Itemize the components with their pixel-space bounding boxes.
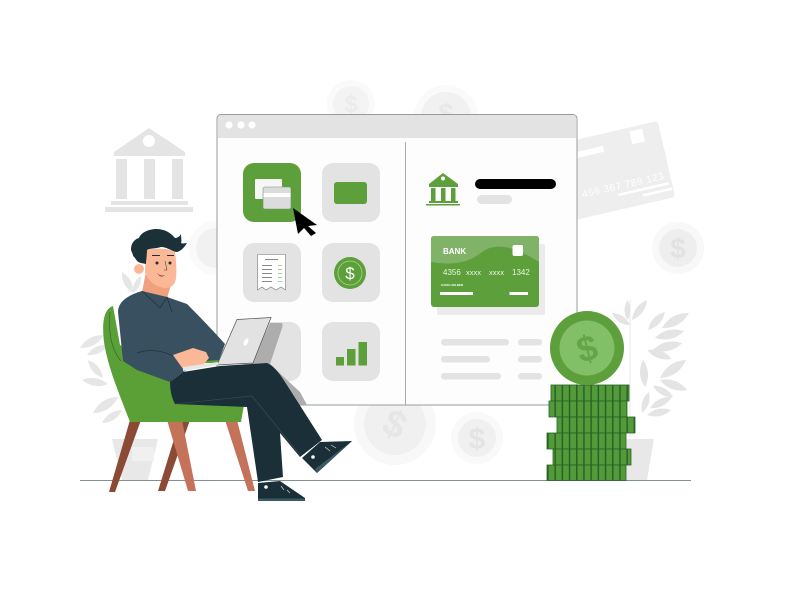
green credit card: xxxx: [489, 268, 504, 277]
credit card shadow: [437, 244, 545, 315]
window control dots: [225, 121, 256, 129]
shirt: [118, 291, 225, 382]
neck: [142, 272, 171, 298]
pants crease: [175, 396, 300, 455]
left plant pot: [112, 439, 158, 480]
background credit card: 456 367 789 123: [581, 171, 666, 201]
detail lines: [441, 339, 542, 380]
eyes and mouth: [152, 255, 174, 277]
bank name bar: [475, 179, 556, 189]
face: [145, 249, 176, 288]
bank sub bar: [477, 195, 512, 204]
laptop screen: [217, 318, 271, 365]
green credit card: [431, 236, 539, 307]
chair: [103, 306, 244, 422]
collar: [142, 291, 172, 312]
tile: card: [322, 163, 380, 222]
background coin bottom large: [354, 383, 436, 465]
hand: [173, 348, 209, 369]
window divider: [405, 142, 406, 405]
pants: [170, 363, 322, 482]
background coin bottom small: [451, 412, 503, 464]
bank icon green: [426, 173, 460, 206]
card number: 4356: [443, 268, 461, 277]
green credit card: xxxx: [466, 268, 481, 277]
laptop and leg shadow: [250, 323, 307, 405]
browser window: [217, 114, 577, 405]
tile: dollar coin: $: [345, 264, 355, 283]
chair arm strip: [205, 357, 219, 363]
background coin right: $: [670, 233, 686, 264]
background bank icon: [105, 128, 193, 212]
laptop logo: [242, 338, 250, 346]
tile: dollar coin: [322, 243, 380, 302]
lower shoe: [258, 481, 305, 501]
ground line: [80, 480, 691, 481]
ear: [134, 264, 144, 274]
background coin top middle: $: [438, 98, 454, 129]
card bank label: BANK: [443, 247, 466, 256]
tile: bar chart: [322, 322, 380, 381]
large dollar coin: $: [572, 326, 602, 371]
right plant pot: [610, 439, 654, 480]
background coin bottom small: $: [469, 423, 486, 456]
tile: hidden: [243, 322, 301, 381]
icon: cursor arrow: [293, 208, 317, 236]
green credit card: 1342: [512, 268, 530, 277]
tile: cards selected: [243, 163, 301, 222]
upper shoe: [302, 441, 352, 473]
left plant: [78, 270, 144, 426]
large dollar coin: [550, 311, 624, 385]
background coin bottom large: $: [376, 401, 413, 448]
background credit card: [553, 121, 675, 221]
hair: [131, 229, 187, 264]
background coin right: [652, 222, 704, 274]
chair legs: [109, 420, 255, 492]
background coin top middle: [414, 85, 478, 149]
background coin top left: [327, 80, 375, 128]
background coin top left: $: [344, 91, 358, 118]
tile: receipt: [243, 243, 301, 302]
window title bar: [218, 115, 576, 138]
green credit card: CARD HOLDER: [441, 283, 464, 287]
laptop base: [183, 362, 218, 371]
coin stack: [547, 385, 635, 480]
background coin left: [189, 221, 243, 275]
right plant: [610, 298, 691, 440]
person: [118, 229, 352, 501]
